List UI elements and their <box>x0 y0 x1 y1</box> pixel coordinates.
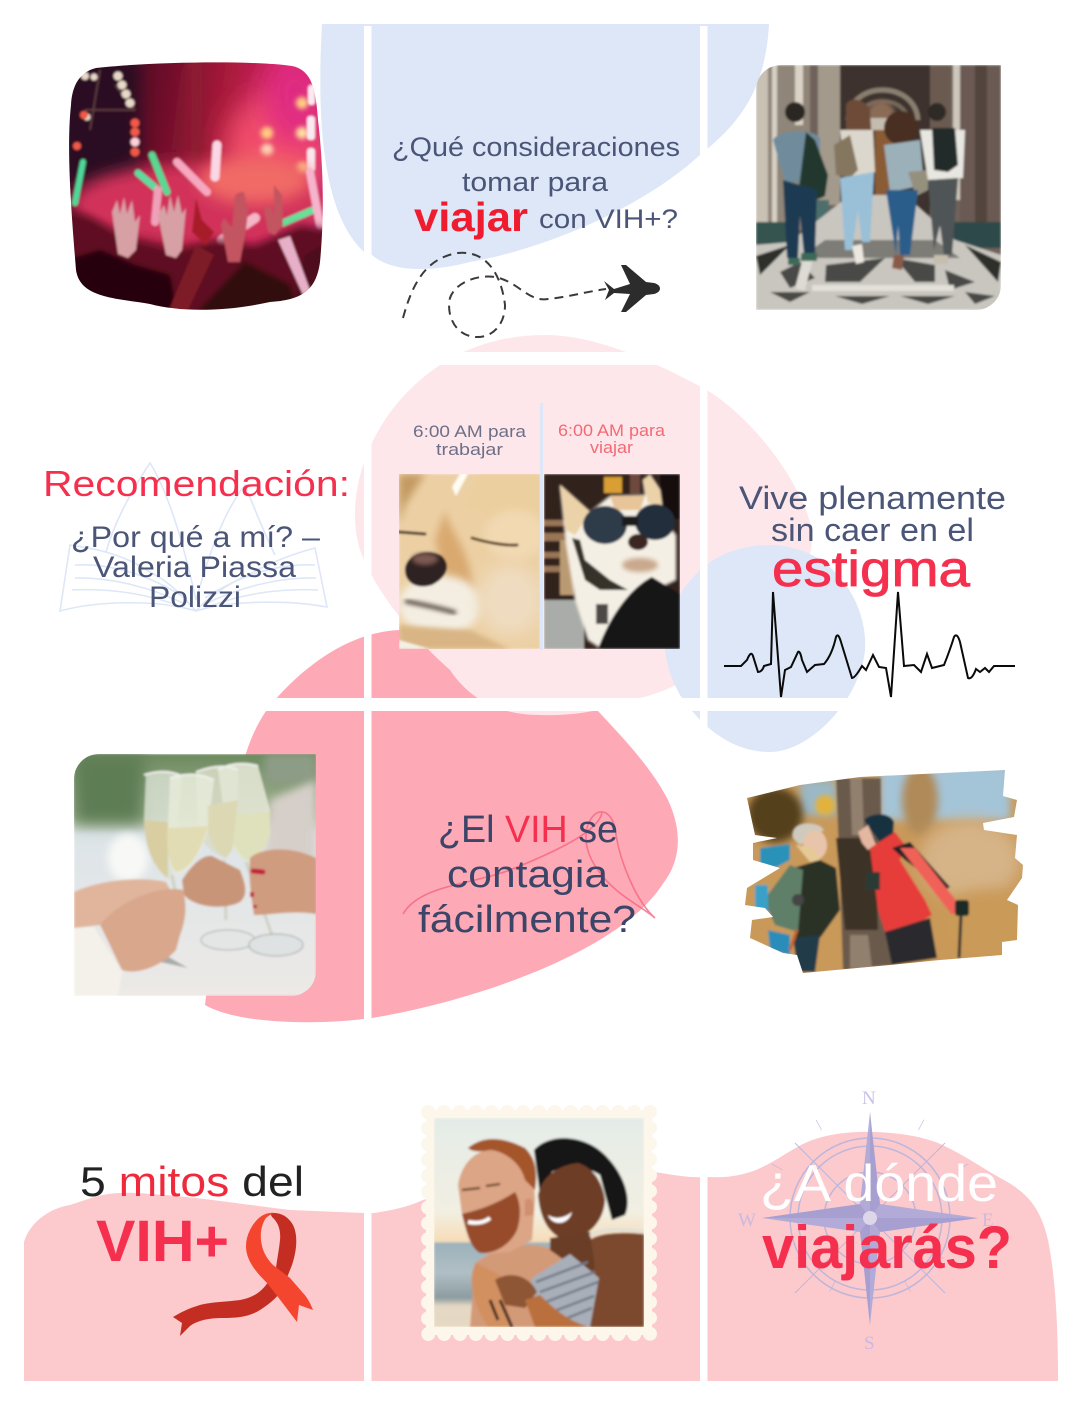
text block: contagio question <box>418 809 636 941</box>
text block: book title: Polizzi <box>149 581 241 614</box>
photo: students walking in corridor <box>756 65 1001 310</box>
text block: contagio question: ¿El VIH se <box>438 809 618 851</box>
hiker right <box>858 814 969 965</box>
text block: contagio question: fácilmente? <box>418 899 636 941</box>
title: viajar question: ¿Qué consideraciones <box>392 132 680 162</box>
background blob: dark pink <box>205 630 678 1022</box>
glasses <box>144 764 303 968</box>
photo: couple on stamp frame <box>426 1110 652 1335</box>
title: viajar question: con VIH+? <box>539 204 678 234</box>
title: viajar question: tomar para <box>462 167 609 197</box>
icon: compass rose: S <box>864 1333 875 1354</box>
text block: book title: Valeria Piassa <box>93 551 296 584</box>
icon: compass rose: E <box>982 1210 994 1231</box>
decorative ribbon outline <box>403 812 655 918</box>
caption: travel: 6:00 AM para <box>558 421 666 440</box>
background blob: blue small <box>665 545 865 752</box>
icon: red awareness ribbon <box>173 1213 313 1336</box>
background blob: blue top <box>320 24 769 269</box>
icon: dashed flight path and plane <box>403 253 660 337</box>
text block: vive plenamente: estigma <box>772 541 970 597</box>
heading: recomendación: Recomendación: <box>43 463 350 504</box>
heading: a dónde viajarás: viajarás? <box>762 1214 1012 1281</box>
text block: book title <box>71 521 320 614</box>
hiker left <box>755 823 840 972</box>
caption: work: 6:00 AM para <box>413 422 527 441</box>
icon: compass rose <box>738 1088 994 1354</box>
text block: vive plenamente <box>739 480 1006 597</box>
heading: VIH+: VIH+ <box>96 1209 229 1274</box>
text block: contagio question: contagia <box>447 854 609 896</box>
caption: travel <box>558 421 666 457</box>
caption: work: trabajar <box>436 440 503 459</box>
hands <box>74 849 316 972</box>
background blob: light pink <box>355 335 812 715</box>
heading: a dónde viajarás <box>760 1155 1012 1281</box>
icon: compass rose: N <box>862 1088 876 1109</box>
photo: champagne toast <box>74 754 316 996</box>
text block: book title: ¿Por qué a mí? – <box>71 521 320 554</box>
photo: sleepy dog <box>398 474 545 649</box>
heading: 5 mitos del: 5 mitos del <box>80 1158 304 1205</box>
title: viajar question <box>392 132 680 240</box>
photo: dog with goggles <box>544 474 680 649</box>
text block: vive plenamente: Vive plenamente <box>739 480 1006 516</box>
text block: vive plenamente: sin caer en el <box>771 512 974 548</box>
icon: open book outline <box>60 463 327 611</box>
icon: ecg line <box>724 592 1015 697</box>
heading: a dónde viajarás: ¿A dónde <box>760 1155 998 1213</box>
icon: compass rose: W <box>738 1210 756 1231</box>
title: viajar question: viajar <box>414 194 528 240</box>
photo: hikers by a tree <box>740 765 1030 980</box>
background blob: bottom pink band <box>24 1132 1058 1381</box>
caption: travel: viajar <box>590 438 633 457</box>
photo: concert crowd <box>69 62 323 310</box>
caption: work <box>413 422 527 459</box>
